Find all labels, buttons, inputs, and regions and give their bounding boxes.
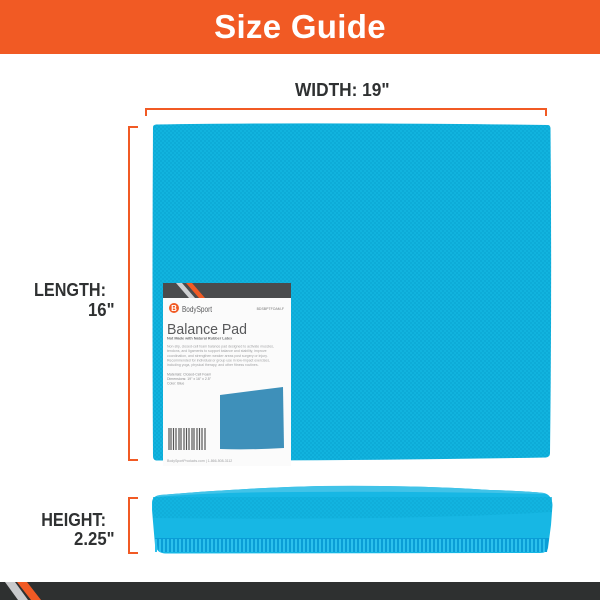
balance pad side view [152, 486, 552, 554]
card header band [163, 283, 291, 298]
height label: HEIGHT: [41, 510, 106, 530]
length label: 16" [88, 300, 115, 320]
width bracket [146, 109, 546, 116]
card logo: BodySport [182, 305, 213, 314]
length bracket [129, 127, 138, 460]
header banner [0, 0, 600, 54]
card heading: Balance Pad [167, 321, 247, 338]
card description: coordination, and strengthen weaker areas post surgery or injury. [167, 354, 268, 358]
product card [163, 283, 291, 466]
card product photo [220, 387, 284, 449]
length label: LENGTH: [34, 280, 106, 300]
card specifications: Color: Blue [167, 382, 184, 386]
card specifications: Dimensions: 19" x 16" x 2.5" [167, 377, 212, 381]
card description: Recommended for individual or group use in low-impact exercises, [167, 358, 270, 362]
card description: tendons, and ligaments to support balance and stability, improve [167, 349, 267, 353]
card description: including yoga, physical therapy, and other fitness routines. [167, 363, 259, 367]
card description: Non-slip, closed-cell foam balance pad designed to activate muscles, [167, 344, 274, 348]
height label: 2.25" [74, 529, 115, 549]
balance pad top view [152, 123, 551, 461]
card logo: B [171, 304, 177, 313]
width label: WIDTH: 19" [295, 80, 390, 100]
title: Size Guide [214, 8, 386, 45]
card part number: BDSBPTFOAM-F [257, 307, 284, 311]
card description [167, 344, 274, 367]
card logo [169, 303, 213, 314]
card specifications: Materials: Closed-Cell Foam [167, 372, 211, 376]
card specifications [167, 372, 212, 386]
length label [34, 280, 115, 320]
card footer text: BodySportProducts.com | 1-866-508-3112 [167, 459, 232, 463]
height bracket [129, 498, 138, 553]
height label [41, 510, 115, 549]
footer bar [0, 582, 600, 600]
card subtitle: Not Made with Natural Rubber Latex [167, 336, 233, 340]
card barcode [169, 428, 205, 450]
